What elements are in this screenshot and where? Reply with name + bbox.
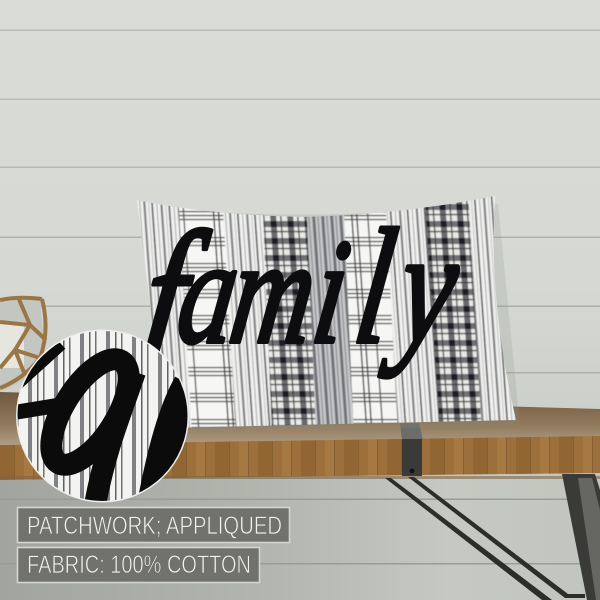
label: patchwork: PATCHWORK; APPLIQUED [27, 512, 282, 540]
pillow shadow [140, 204, 520, 432]
pillow lettering: family: m [222, 208, 326, 375]
bench metal strap [400, 423, 423, 476]
bench legs [385, 474, 600, 600]
jar with rope net [0, 296, 46, 392]
pillow lettering: family: i [304, 208, 359, 375]
bench front face [0, 436, 600, 480]
bench [0, 392, 600, 480]
pillow [137, 196, 516, 428]
pillow lettering: family: l [346, 195, 406, 378]
inset circle: applique close-up [15, 328, 191, 505]
label: fabric [18, 548, 260, 582]
pillow patchwork panels [137, 196, 516, 428]
label: fabric: FABRIC: 100% COTTON [27, 551, 251, 579]
pillow lettering: family: a [169, 208, 249, 375]
pillow lettering: family: f [129, 192, 218, 409]
label: patchwork [18, 508, 290, 542]
bench top surface [0, 392, 600, 445]
pillow lettering: family: y [378, 195, 470, 378]
